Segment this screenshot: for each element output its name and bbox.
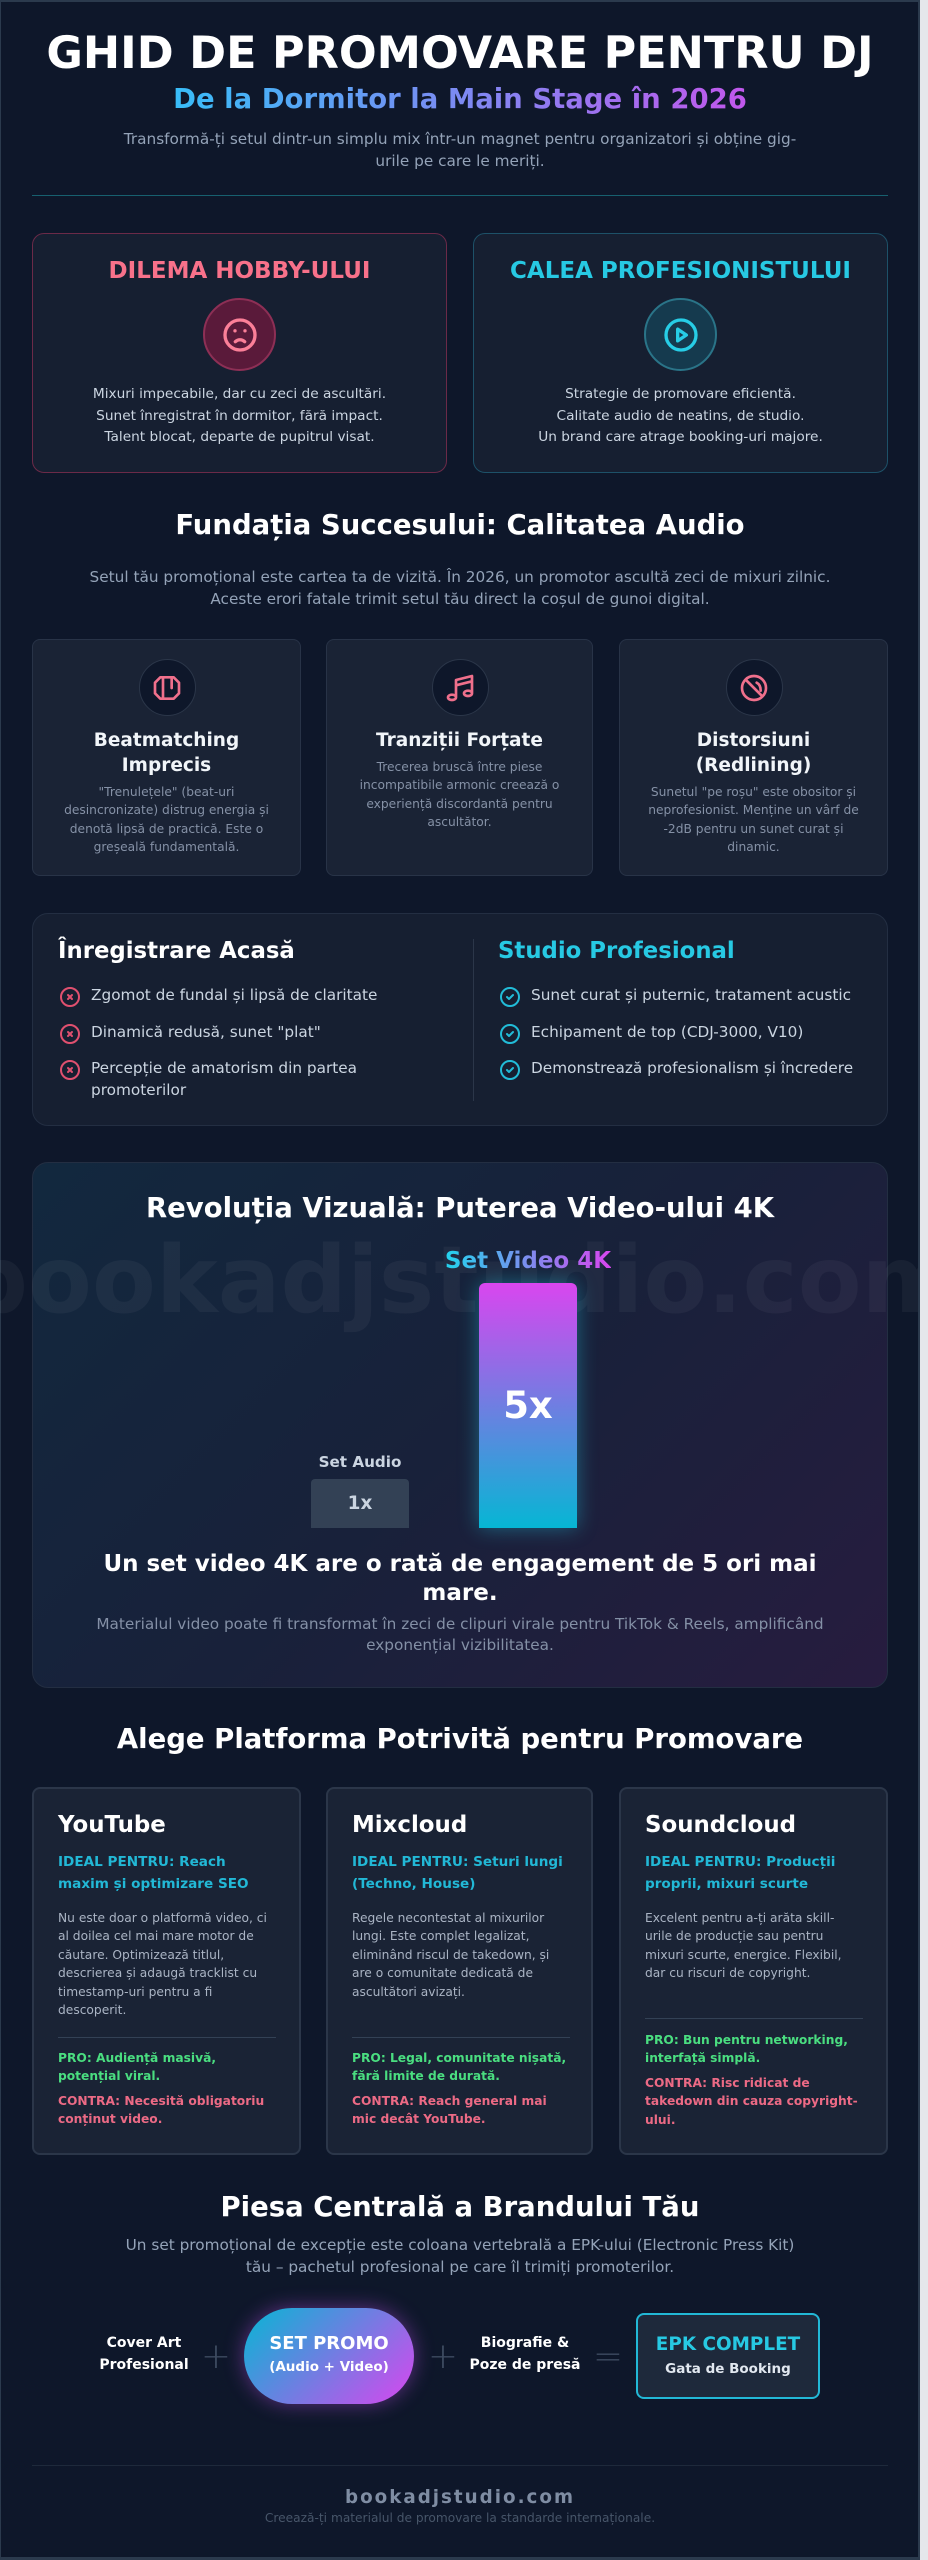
card text: desincronizate) distrug energia și bbox=[64, 803, 269, 817]
card title: Beatmatching bbox=[94, 730, 239, 751]
contra: ului. bbox=[645, 2113, 676, 2127]
EPK sublabel: Gata de Booking bbox=[665, 2361, 791, 2377]
item: set promo bbox=[244, 2308, 414, 2404]
card: forced transitions bbox=[326, 639, 593, 876]
description: descoperit. bbox=[58, 2003, 126, 2017]
card text: Trecerea bruscă între piese bbox=[377, 760, 542, 774]
item: Percepție de amatorism din partea bbox=[91, 1059, 357, 1077]
bar: audio 1x: 1x bbox=[348, 1493, 372, 1514]
symbol: plus: + bbox=[428, 2336, 458, 2377]
item: promoterilor bbox=[91, 1081, 186, 1099]
card title bbox=[696, 730, 811, 776]
tagline: urile pe care le meriți. bbox=[375, 152, 545, 170]
platform name: Mixcloud bbox=[352, 1812, 467, 1838]
icon: check bbox=[500, 1024, 520, 1044]
text: pro points bbox=[538, 386, 823, 445]
bar: video 5x: 5x bbox=[503, 1384, 553, 1427]
card text: Sunetul "pe roșu" este obositor și bbox=[651, 785, 856, 799]
footer tagline: Creează-ți materialul de promovare la standarde internaționale. bbox=[265, 2511, 655, 2525]
symbol: equals: = bbox=[593, 2336, 623, 2377]
heading: studio: Studio Profesional bbox=[498, 938, 735, 964]
contra: mic decât YouTube. bbox=[352, 2112, 486, 2126]
best for: maxim și optimizare SEO bbox=[58, 1876, 249, 1892]
header bbox=[46, 28, 874, 170]
card text bbox=[360, 760, 559, 829]
best for: (Techno, House) bbox=[352, 1876, 475, 1892]
pro: PRO: Legal, comunitate nișată, bbox=[352, 2051, 566, 2065]
icon: cross bbox=[60, 987, 80, 1007]
text: pro points: Un brand care atrage booking-uri majore. bbox=[538, 429, 823, 445]
card: distortion bbox=[619, 639, 888, 876]
label: audio: Set Audio bbox=[319, 1453, 401, 1471]
pro: potențial viral. bbox=[58, 2069, 160, 2083]
platform name: Soundcloud bbox=[645, 1812, 796, 1838]
set promo label: SET PROMO bbox=[269, 2333, 389, 2354]
icon: cross bbox=[60, 1024, 80, 1044]
text: dilemma points: Sunet înregistrat în dormitor, fără impact. bbox=[96, 408, 383, 424]
best for: proprii, mixuri scurte bbox=[645, 1876, 808, 1892]
card text: neprofesionist. Menține un vârf de bbox=[648, 803, 859, 817]
card title: Imprecis bbox=[122, 755, 211, 776]
icon: music note bbox=[432, 659, 488, 716]
tagline bbox=[124, 130, 796, 170]
bar: video 5x bbox=[479, 1283, 577, 1528]
description: dar cu riscuri de copyright. bbox=[645, 1966, 810, 1980]
description: Regele necontestat al mixurilor bbox=[352, 1911, 544, 1925]
best for: IDEAL PENTRU: Seturi lungi bbox=[352, 1854, 563, 1870]
panel: hobby dilemma bbox=[32, 233, 447, 473]
list: home recording bbox=[60, 986, 377, 1099]
description: Excelent pentru a-ți arăta skill- bbox=[645, 1911, 834, 1925]
card: Soundcloud bbox=[619, 1787, 888, 2155]
card text: incompatibile armonic creează o bbox=[360, 778, 559, 792]
text: dilemma points: Talent blocat, departe de pupitrul visat. bbox=[104, 429, 375, 445]
symbol: plus: + bbox=[201, 2336, 231, 2377]
list: studio bbox=[500, 986, 853, 1080]
text: EPK intro: Un set promoțional de excepție este coloana vertebrală a EPK-ului (Electronic Press Kit) bbox=[126, 2236, 794, 2254]
text: EPK intro: tău – pachetul profesional pe care îl trimiți promoterilor. bbox=[246, 2258, 674, 2276]
pro bbox=[58, 2051, 216, 2083]
card text: experiență discordantă pentru bbox=[366, 797, 553, 811]
set promo sublabel: (Audio + Video) bbox=[269, 2359, 389, 2375]
description bbox=[58, 1911, 267, 2017]
best for: IDEAL PENTRU: Producții bbox=[645, 1854, 835, 1870]
card text bbox=[648, 785, 859, 854]
contra: CONTRA: Risc ridicat de bbox=[645, 2076, 810, 2090]
item: bio: Biografie & bbox=[481, 2335, 569, 2351]
card title: Tranziții Forțate bbox=[376, 730, 543, 751]
description bbox=[645, 1911, 842, 1980]
description: al doilea cel mai mare motor de bbox=[58, 1929, 254, 1943]
title: GHID DE PROMOVARE PENTRU DJ bbox=[46, 28, 874, 79]
card text: -2dB pentru un sunet curat și bbox=[664, 822, 843, 836]
contra: CONTRA: Reach general mai bbox=[352, 2094, 547, 2108]
icon: play bbox=[644, 298, 717, 371]
best for bbox=[58, 1854, 249, 1892]
item: Sunet curat și puternic, tratament acustic bbox=[531, 986, 851, 1004]
icon: check bbox=[500, 1060, 520, 1080]
text: pro points: Strategie de promovare eficientă. bbox=[565, 386, 796, 402]
heading: calea: CALEA PROFESIONISTULUI bbox=[510, 258, 851, 284]
card text: denotă lipsă de practică. Este o bbox=[70, 822, 263, 836]
card: beatmatching bbox=[32, 639, 301, 876]
item: Echipament de top (CDJ-3000, V10) bbox=[531, 1023, 803, 1041]
heading: brand centerpiece: Piesa Centrală a Brandului Tău bbox=[221, 2191, 699, 2223]
description: mixuri scurte, energice. Flexibil, bbox=[645, 1948, 842, 1962]
description: lungi. Este complet legalizat, bbox=[352, 1929, 530, 1943]
statement: Un set video 4K are o rată de engagement de 5 ori mai bbox=[103, 1551, 817, 1577]
card text: "Trenulețele" (beat-uri bbox=[99, 785, 234, 799]
contra bbox=[352, 2094, 547, 2126]
text: video explanation: Materialul video poate fi transformat în zeci de clipuri virale pentru TikTok & Reels, amplificând bbox=[96, 1615, 824, 1633]
best for: IDEAL PENTRU: Reach bbox=[58, 1854, 226, 1870]
item: Dinamică redusă, sunet "plat" bbox=[91, 1023, 321, 1041]
text: audio intro bbox=[90, 568, 830, 608]
icon: cross bbox=[60, 1060, 80, 1080]
heading: home recording: Înregistrare Acasă bbox=[58, 938, 295, 964]
pro: PRO: Audiență masivă, bbox=[58, 2051, 216, 2065]
pro: interfață simplă. bbox=[645, 2051, 760, 2065]
panel: pro path bbox=[473, 233, 888, 473]
bar: audio 1x bbox=[311, 1479, 409, 1528]
card title: (Redlining) bbox=[696, 755, 811, 776]
card text: greșeală fundamentală. bbox=[94, 840, 239, 854]
description: Nu este doar o platformă video, ci bbox=[58, 1911, 267, 1925]
panel: 4K video revolution bbox=[32, 1162, 888, 1688]
heading: dilema: DILEMA HOBBY-ULUI bbox=[109, 258, 370, 284]
description: eliminând riscul de takedown, și bbox=[352, 1948, 549, 1962]
footer bbox=[0, 2484, 920, 2532]
subtitle: De la Dormitor la Main Stage în 2026 bbox=[173, 83, 747, 115]
contra bbox=[58, 2094, 264, 2126]
flow: EPK equation bbox=[99, 2296, 820, 2416]
card title: Distorsiuni bbox=[697, 730, 810, 751]
text: video explanation bbox=[96, 1615, 824, 1654]
card: Mixcloud bbox=[326, 1787, 593, 2155]
heading: video: Revoluția Vizuală: Puterea Video-ului 4K bbox=[146, 1192, 774, 1224]
text: audio intro: Setul tău promoțional este cartea ta de vizită. În 2026, un promotor ascultă zeci de mixuri zilnic. bbox=[90, 568, 830, 586]
contra bbox=[645, 2076, 858, 2127]
icon: beatmatching bbox=[138, 659, 196, 716]
statement bbox=[103, 1551, 817, 1606]
description: timestamp-uri pentru a fi bbox=[58, 1985, 212, 1999]
item: Demonstrează profesionalism și încredere bbox=[531, 1059, 853, 1077]
description: descrierea și adaugă tracklist cu bbox=[58, 1966, 257, 1980]
text: dilemma points bbox=[93, 386, 386, 445]
tagline: Transformă-ți setul dintr-un simplu mix într-un magnet pentru organizatori și obține gig- bbox=[124, 130, 796, 148]
label: video: Set Video 4K bbox=[445, 1248, 611, 1274]
contra: conținut video. bbox=[58, 2112, 162, 2126]
card text: dinamic. bbox=[727, 840, 780, 854]
item: cover art bbox=[99, 2335, 189, 2373]
pro: fără limite de durată. bbox=[352, 2069, 500, 2083]
heading: platforms: Alege Platforma Potrivită pentru Promovare bbox=[117, 1723, 803, 1755]
icon: sad face bbox=[203, 298, 276, 371]
heading: audio quality: Fundația Succesului: Calitatea Audio bbox=[175, 509, 745, 541]
card title bbox=[94, 730, 239, 776]
best for bbox=[645, 1854, 835, 1892]
contra: CONTRA: Necesită obligatoriu bbox=[58, 2094, 264, 2108]
item: Zgomot de fundal și lipsă de claritate bbox=[91, 986, 377, 1004]
text: dilemma points: Mixuri impecabile, dar cu zeci de ascultări. bbox=[93, 386, 386, 402]
pro: PRO: Bun pentru networking, bbox=[645, 2033, 848, 2047]
text: video explanation: exponențial vizibilitatea. bbox=[366, 1636, 554, 1654]
panel: home vs studio comparison bbox=[32, 913, 888, 1126]
description: căutare. Optimizează titlul, bbox=[58, 1948, 224, 1962]
result: EPK bbox=[636, 2313, 820, 2399]
pro bbox=[352, 2051, 566, 2083]
item: bio bbox=[445, 2333, 605, 2376]
platform name: YouTube bbox=[58, 1812, 166, 1838]
pro bbox=[645, 2033, 848, 2065]
card: YouTube bbox=[32, 1787, 301, 2155]
contra: takedown din cauza copyright- bbox=[645, 2094, 858, 2108]
item: cover art: Cover Art bbox=[107, 2335, 181, 2351]
item: bio: Poze de presă bbox=[470, 2357, 580, 2373]
item bbox=[91, 1059, 357, 1099]
text: EPK intro bbox=[126, 2236, 794, 2276]
icon: prohibited bbox=[726, 659, 782, 716]
EPK label: EPK COMPLET bbox=[656, 2334, 800, 2355]
icon: check bbox=[500, 987, 520, 1007]
description bbox=[352, 1911, 549, 1999]
card text bbox=[64, 785, 269, 854]
description: urile de producție sau pentru bbox=[645, 1929, 823, 1943]
best for bbox=[352, 1854, 563, 1892]
description: ascultători avizați. bbox=[352, 1985, 465, 1999]
statement: mare. bbox=[422, 1580, 498, 1606]
bar chart: engagement bbox=[311, 1248, 611, 1540]
text: pro points: Calitate audio de neatins, de studio. bbox=[557, 408, 804, 424]
footer brand: bookadjstudio.com bbox=[345, 2487, 575, 2508]
item: cover art: Profesional bbox=[99, 2357, 189, 2373]
text: audio intro: Aceste erori fatale trimit setul tău direct la coșul de gunoi digital. bbox=[210, 590, 710, 608]
card text: ascultător. bbox=[427, 815, 492, 829]
description: are o comunitate dedicată de bbox=[352, 1966, 533, 1980]
